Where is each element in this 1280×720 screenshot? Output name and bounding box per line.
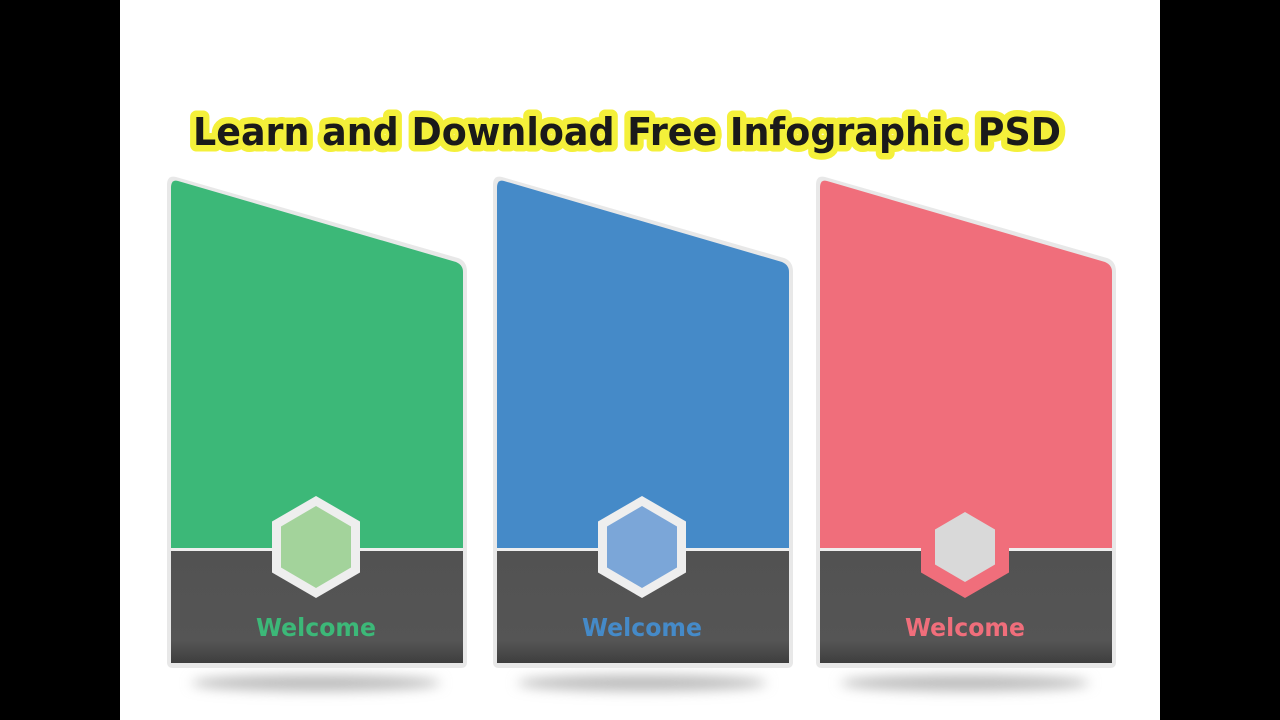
icon: hexagon — [921, 496, 1009, 598]
label: Welcome — [905, 613, 1025, 642]
icon: hexagon — [598, 496, 686, 598]
card: blue — [493, 177, 793, 691]
label: Welcome — [582, 613, 702, 642]
icon: hexagon — [272, 496, 360, 598]
label: Welcome — [256, 613, 376, 642]
card: green — [167, 177, 467, 691]
title: Learn and Download Free Infographic PSD — [193, 110, 1061, 154]
card: red — [816, 177, 1116, 691]
